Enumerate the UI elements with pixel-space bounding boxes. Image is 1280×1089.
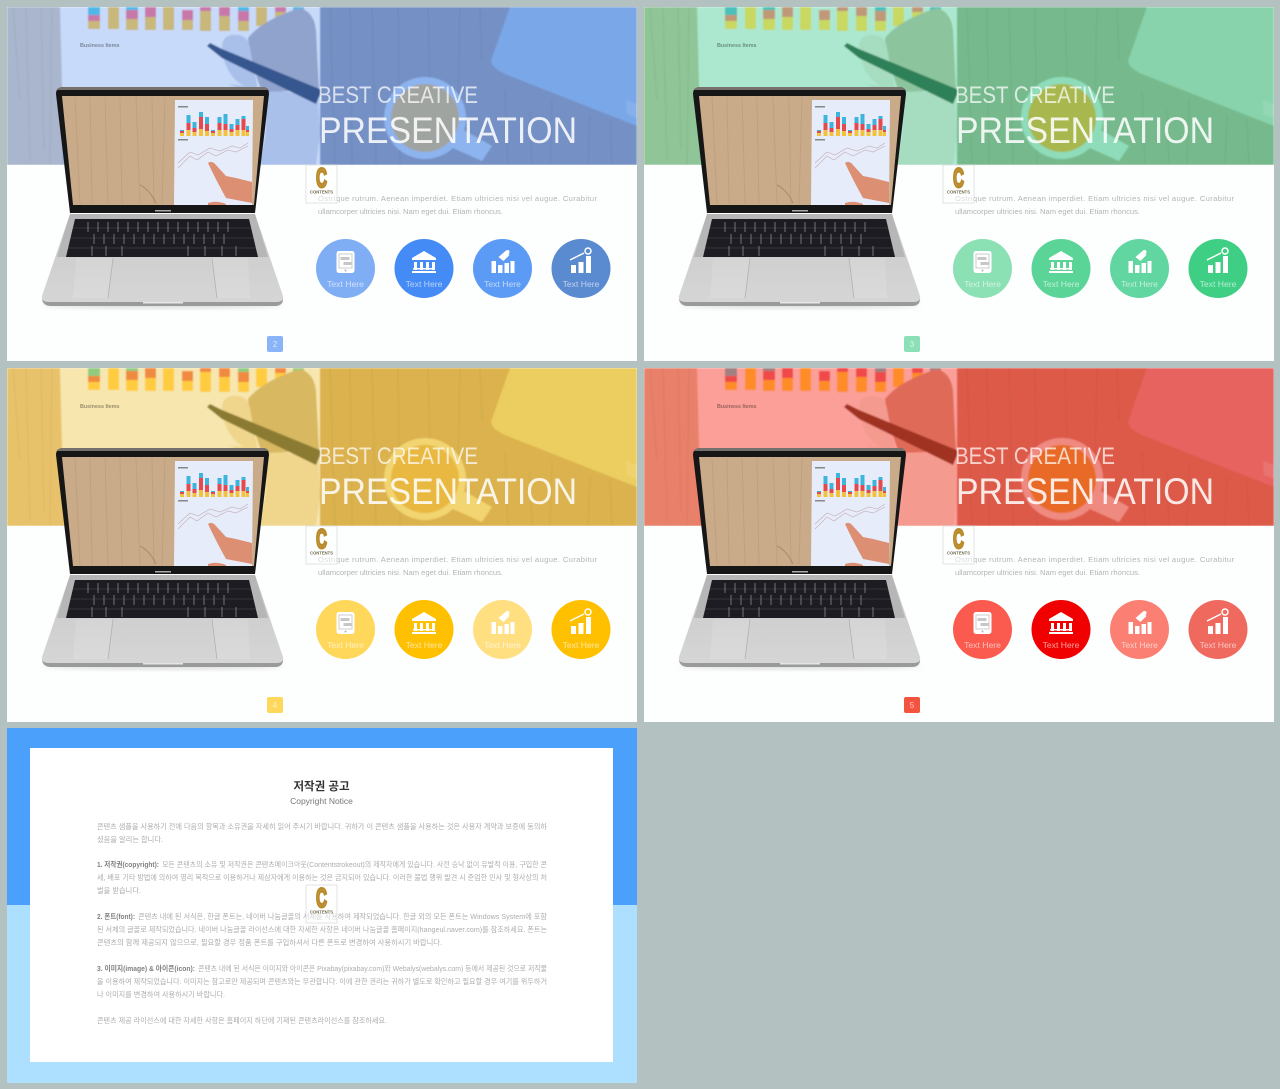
icon circle: tablet: Text Here [964,640,1001,650]
description text [318,555,597,577]
notice intro paragraph [97,822,547,844]
chart label: Business Items [717,404,757,410]
watermark logo: C [316,882,327,913]
watermark logo: CONTENTS [310,910,333,914]
icon circle: tablet [316,239,375,298]
page number badge [267,336,283,352]
notice heading: 저작권 공고 [293,779,350,793]
title: PRESENTATION [319,110,577,151]
watermark logo [306,882,337,923]
title [318,82,577,151]
title: BEST CREATIVE [955,82,1115,109]
title: PRESENTATION [319,471,577,512]
description text: ullamcorper ultricies nisi. Nam eget dui. Etiam rhoncus. [318,207,503,216]
icon circle: tablet: Text Here [327,279,364,289]
panel: blue presentation slide [7,7,637,361]
header photo band [644,368,1274,526]
laptop mockup [42,448,283,669]
notice section 3: image and icon: 콘텐츠 내에 된 서식은 이미지와 아이콘은 Pixabay(pixabay.com)와 Webalys(webalys.com) 등에서 제공된 것으로 저작물 [198,964,547,973]
icon circle: bank [394,239,454,298]
notice section 1: copyright [97,860,547,895]
chart label: Business Items [80,43,120,49]
title: PRESENTATION [956,110,1214,151]
laptop mockup [679,448,920,669]
notice section 1: copyright: 세, 배포 기타 방법에 의하여 영리 목적으로 이용하거나 제삼자에게 이용하는 것은 금지되어 있습니다. 이러한 불법 행위 발견 시 준엄한 민사 및 형사상의 처 [97,873,547,882]
notice section 3: image and icon: 나 이미지를 변경하여 사용하시기 바랍니다. [97,990,225,999]
notice intro paragraph: 셨음을 알리는 합니다. [97,835,163,844]
notice intro paragraph: 콘텐츠 샘플을 사용하기 전에 다음의 항목과 소유권을 자세히 읽어 주시기 바랍니다. 귀하가 이 콘텐츠 샘플을 사용하는 것은 사용자 계약과 보증에 동의하 [97,822,547,831]
icon circle: bank: Text Here [1043,640,1080,650]
header photo band [644,7,1274,165]
panel: green presentation slide [644,7,1274,361]
icon circle: growth: Text Here [1200,279,1237,289]
icon circle: bank [394,600,454,659]
icon circle: growth [552,239,610,298]
description text: Ostrique rutrum. Aenean imperdiet. Etiam ultricies nisi vel augue. Curabitur [955,555,1234,564]
notice section 2: font: 콘텐츠 내에 된 서식은, 한글 폰트는, 네이버 나눔글꼴의 서체를 사용하여 제작되었습니다. 한글 외의 모든 폰트는 Windows System에 포함 [138,912,547,921]
panel: copyright notice slide [7,728,637,1083]
icon circle: tablet [953,600,1012,659]
page number badge: 5 [910,701,915,710]
title [955,82,1214,151]
notice section 1: copyright: 벌을 받습니다. [97,886,141,895]
notice section 1: copyright: 1. 저작권(copyright): [97,860,159,869]
icon circle: growth: Text Here [563,640,600,650]
notice section 3: image and icon [97,964,547,999]
icon circle: growth: Text Here [563,279,600,289]
icon circle: bar chart: Text Here [484,279,521,289]
icon circle: bar chart: Text Here [1121,640,1158,650]
watermark logo [943,523,974,564]
watermark logo: CONTENTS [947,550,970,556]
notice heading [290,779,353,806]
watermark logo: C [953,162,964,193]
icon circle: bank: Text Here [406,640,443,650]
laptop mockup [42,87,283,308]
notice section 2: font [97,912,547,947]
icon circle: bank: Text Here [1043,279,1080,289]
page number badge [904,336,920,352]
icon circle: bar chart: Text Here [484,640,521,650]
watermark logo: CONTENTS [310,190,333,194]
chart label: Business Items [717,43,757,49]
notice section 3: image and icon: 3. 이미지(image) & 아이콘(icon): [97,964,195,973]
description text: Ostrique rutrum. Aenean imperdiet. Etiam ultricies nisi vel augue. Curabitur [318,194,597,203]
page number badge [904,697,920,713]
notice section 3: image and icon: 을 이용하여 제작되었습니다. 이미지는 참고로만 제공되며 콘텐츠와는 무관합니다. 이에 관한 권리는 귀하가 별도로 확인하고 필요할 경우 여기를 위두하거 [97,977,547,986]
watermark logo: C [316,162,327,193]
description text [955,194,1234,216]
notice section 2: font: 2. 폰트(font): [97,912,135,921]
panel: yellow presentation slide [7,368,637,722]
icon circle: tablet: Text Here [327,640,364,650]
watermark logo: C [953,523,964,554]
title: BEST CREATIVE [955,443,1115,470]
icon circle: tablet: Text Here [964,279,1001,289]
description text: ullamcorper ultricies nisi. Nam eget dui. Etiam rhoncus. [318,568,503,577]
icon circle: growth [1188,600,1248,659]
page number badge [267,697,283,713]
watermark logo: CONTENTS [947,190,970,194]
header photo band [7,368,637,526]
icon circle: bar chart [473,600,532,659]
icon circle: bank: Text Here [406,279,443,289]
watermark logo [306,523,337,564]
notice section 2: font: 된 서체의 글꼴로 제작되었습니다. 네이버 나눔글꼴 라이선스에 대한 자세한 사항은 네이버 나눔글꼴 홈페이지(hangeul.naver.com)를 참조하세요. 폰트는 [97,925,547,934]
icon circle: bar chart [1110,600,1169,659]
title [955,443,1214,512]
description text: ullamcorper ultricies nisi. Nam eget dui. Etiam rhoncus. [955,207,1140,216]
icon circle: growth [552,600,610,659]
watermark logo [943,162,974,203]
description text: Ostrique rutrum. Aenean imperdiet. Etiam ultricies nisi vel augue. Curabitur [955,194,1234,203]
icon circle: bank [1032,600,1090,659]
icon circle: growth [1188,239,1248,298]
watermark logo [306,162,337,203]
title [318,443,577,512]
notice closing line: 콘텐츠 제공 라이선스에 대한 자세한 사항은 홈페이지 하단에 기재된 콘텐츠라이선스를 참조하세요. [97,1016,387,1025]
description text: ullamcorper ultricies nisi. Nam eget dui. Etiam rhoncus. [955,568,1140,577]
watermark logo: CONTENTS [310,550,333,556]
icon circle: bank [1032,239,1090,298]
watermark logo: C [316,523,327,554]
icon circle: bar chart: Text Here [1121,279,1158,289]
laptop mockup [679,87,920,308]
page number badge: 4 [273,701,278,710]
page number badge: 3 [910,340,915,349]
icon circle: bar chart [1110,239,1169,298]
description text: Ostrique rutrum. Aenean imperdiet. Etiam ultricies nisi vel augue. Curabitur [318,555,597,564]
notice heading: Copyright Notice [290,796,353,806]
page number badge: 2 [273,340,278,349]
header photo band [7,7,637,165]
notice section 1: copyright: 모든 콘텐츠의 소유 및 저작권은 콘텐츠메이크아웃(Contentstrokeout)의 제작자에게 있습니다. 사전 승낙 없이 유발적 이용, 구입한 콘 [162,860,547,869]
panel: red presentation slide [644,368,1274,722]
icon circle: growth: Text Here [1200,640,1237,650]
icon circle: bar chart [473,239,532,298]
icon circle: tablet [953,239,1012,298]
description text [318,194,597,216]
chart label: Business Items [80,404,120,410]
title: PRESENTATION [956,471,1214,512]
notice section 2: font: 콘텐츠의 함께 제공되지 않으므로, 필요할 경우 정품 폰트를 구입하셔서 다른 폰트로 변경하여 사용하시기 바랍니다. [97,938,442,947]
description text [955,555,1234,577]
title: BEST CREATIVE [318,82,478,109]
icon circle: tablet [316,600,375,659]
title: BEST CREATIVE [318,443,478,470]
